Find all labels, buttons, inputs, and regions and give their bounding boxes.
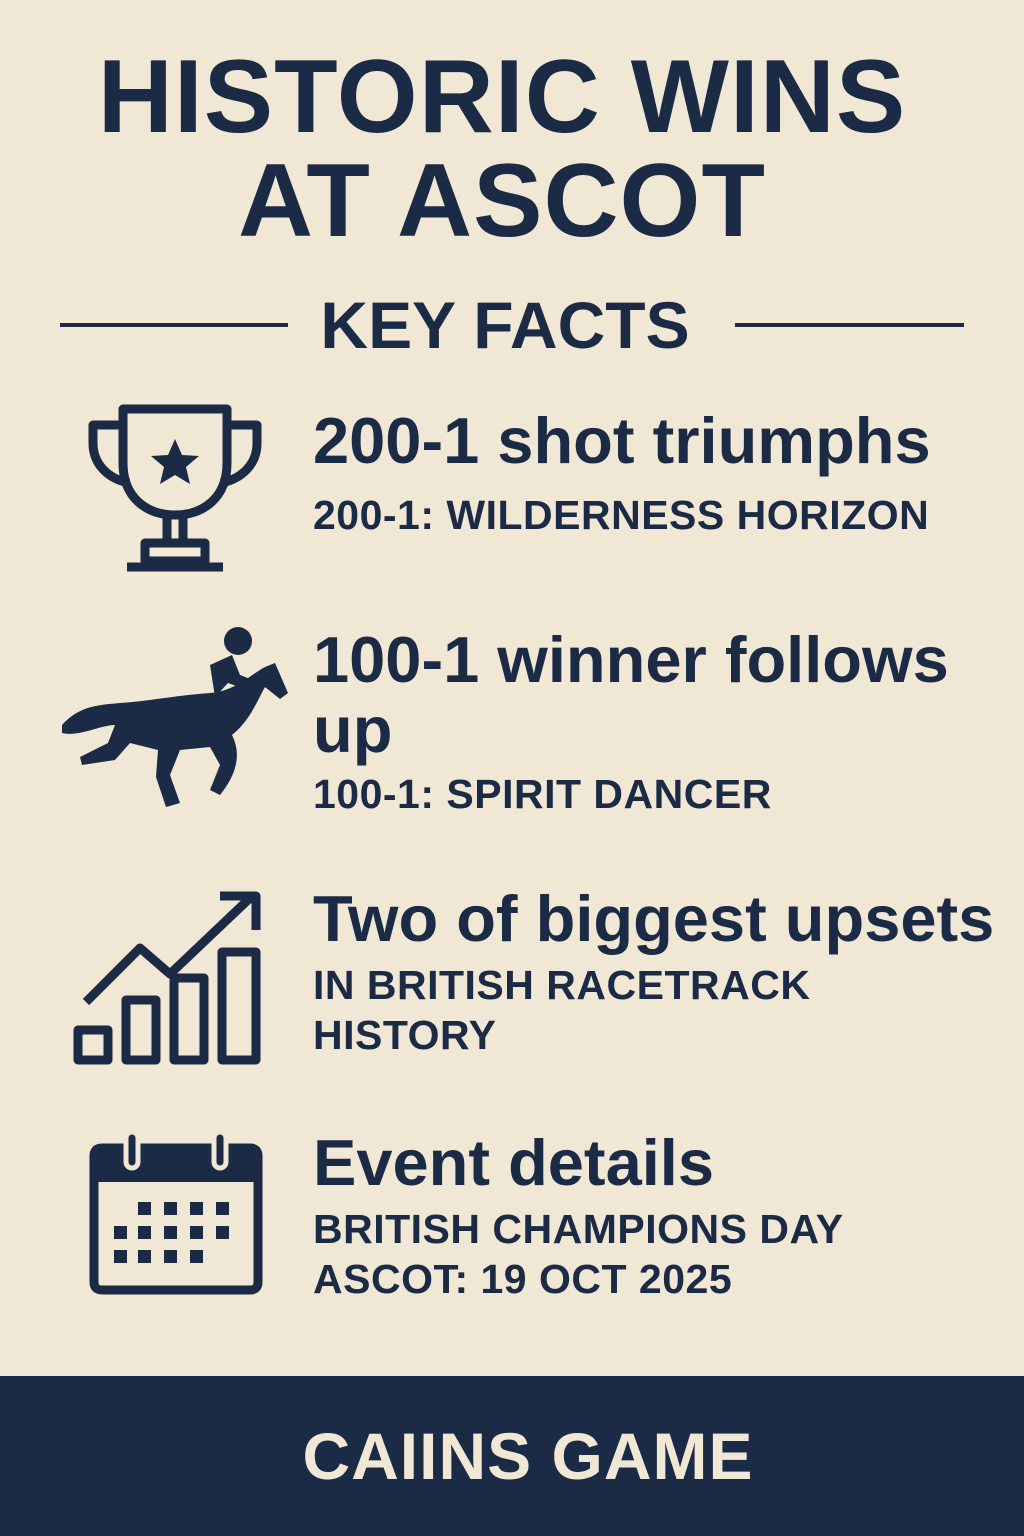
title: AT ASCOT (238, 143, 766, 259)
title: HISTORIC WINS (98, 39, 906, 155)
fact 2 (313, 623, 949, 817)
icon: calendar (90, 1134, 262, 1294)
icon: trophy (88, 404, 262, 572)
fact 4: Event details (313, 1126, 714, 1199)
fact 3 (313, 882, 994, 1058)
fact 3: IN BRITISH RACETRACK (313, 962, 810, 1008)
icon: horse and jockey (62, 627, 288, 807)
fact 3: Two of biggest upsets (313, 882, 994, 955)
fact 1 (313, 404, 931, 538)
fact 1: 200-1 shot triumphs (313, 404, 931, 477)
fact 3: HISTORY (313, 1012, 496, 1058)
fact 2: 100-1: SPIRIT DANCER (313, 771, 772, 817)
fact 4 (313, 1126, 844, 1302)
footer: CAIINS GAME (302, 1419, 754, 1493)
footer (0, 1376, 1024, 1536)
fact 2: up (313, 693, 392, 766)
fact 4: BRITISH CHAMPIONS DAY (313, 1206, 844, 1252)
fact 1: 200-1: WILDERNESS HORIZON (313, 492, 929, 538)
fact 2: 100-1 winner follows (313, 623, 949, 696)
fact 4: ASCOT: 19 OCT 2025 (313, 1256, 732, 1302)
heading: key facts: KEY FACTS (320, 288, 690, 362)
title (98, 39, 906, 259)
icon: bar chart with arrow (74, 892, 260, 1064)
heading: key facts (60, 288, 964, 362)
